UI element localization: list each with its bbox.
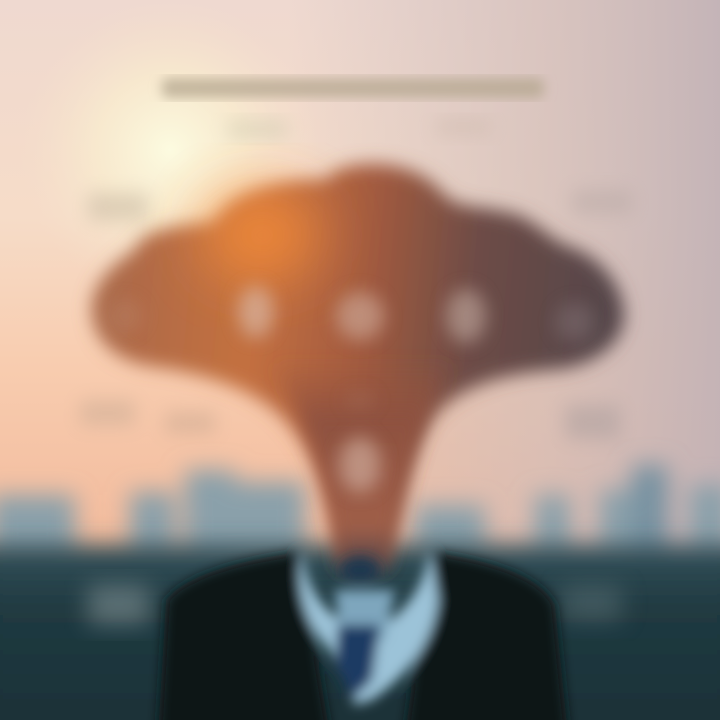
city skyline	[0, 465, 720, 565]
cloud icons	[107, 286, 595, 493]
neck	[340, 557, 380, 583]
shirt collar	[300, 548, 438, 705]
cloud head with funnel	[92, 164, 624, 570]
subtitle labels	[228, 120, 491, 138]
businessman suit	[158, 548, 568, 720]
orange highlight	[202, 193, 322, 277]
right jacket	[405, 552, 568, 720]
funnel shading	[270, 360, 455, 570]
tie	[335, 625, 380, 700]
cloud shape	[92, 164, 624, 565]
lower labels	[88, 585, 622, 625]
left jacket	[158, 552, 330, 720]
title	[162, 78, 544, 98]
dark ground	[0, 545, 720, 720]
side labels	[80, 190, 632, 439]
shirt centre	[335, 590, 395, 640]
